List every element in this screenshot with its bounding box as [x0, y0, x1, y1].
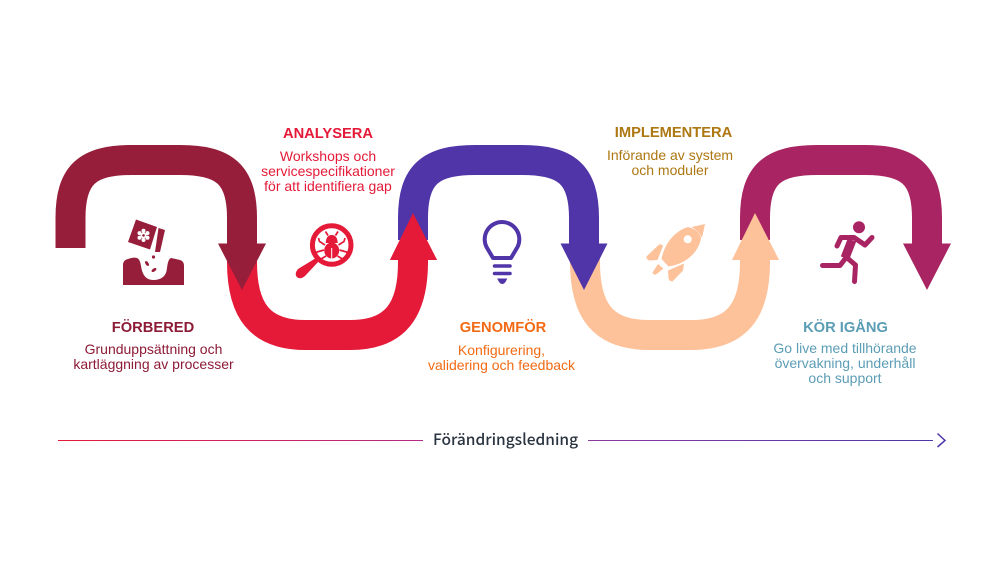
text: kör igång: KÖR IGÅNG — [803, 320, 888, 336]
arrow: genomför (purple) — [390, 160, 608, 290]
icon: light bulb — [485, 222, 519, 284]
icon: magnifier with bug — [296, 226, 351, 278]
text: förbered — [73, 319, 234, 372]
text: kör igång: övervakning, underhåll — [775, 355, 915, 371]
text: implementera — [607, 125, 733, 178]
arrow: förbered (dark red) — [70, 160, 266, 290]
timeline: förändringsledning — [58, 428, 945, 450]
arrow: analysera (red) — [242, 213, 437, 335]
text: analysera — [261, 126, 395, 194]
text: kör igång: och support — [808, 370, 882, 386]
text: genomför: Konfigurering, — [458, 342, 545, 358]
icon: rocket — [646, 224, 705, 282]
text: genomför: GENOMFÖR — [460, 320, 546, 336]
text: förbered: Grunduppsättning och — [85, 341, 222, 357]
text: analysera: Workshops och — [280, 148, 376, 164]
text: implementera: och moduler — [631, 162, 709, 178]
icon: running person — [822, 221, 872, 282]
text: kör igång: Go live med tillhörande — [773, 340, 917, 356]
text: analysera: ANALYSERA — [283, 126, 373, 142]
arrow: implementera (peach) — [585, 213, 779, 335]
text: analysera: servicespecifikationer — [261, 163, 395, 179]
timeline: förändringsledning: Förändringsledning — [433, 428, 578, 450]
icon: seed bag pouring into soil — [123, 220, 184, 285]
text: genomför: validering och feedback — [428, 357, 575, 373]
text: förbered: kartläggning av processer — [73, 356, 234, 372]
text: förbered: FÖRBERED — [112, 320, 194, 336]
text: genomför — [428, 319, 575, 373]
text: implementera: Införande av system — [607, 147, 733, 163]
text: kör igång — [773, 319, 917, 386]
text: implementera: IMPLEMENTERA — [615, 125, 732, 141]
text: analysera: för att identifiera gap — [264, 178, 392, 194]
arrow: kör igång (magenta) — [732, 160, 951, 290]
